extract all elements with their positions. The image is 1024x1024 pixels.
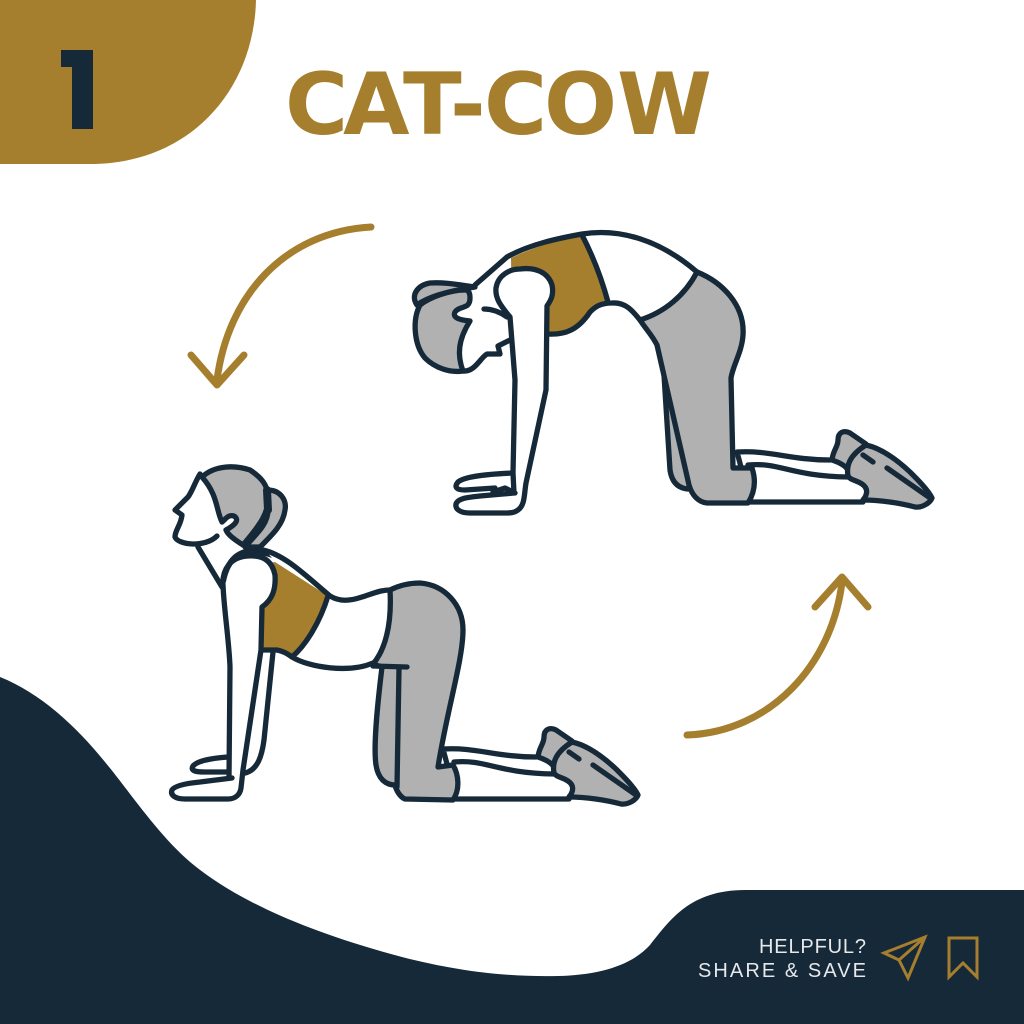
hair tie xyxy=(267,490,268,510)
footer call to action xyxy=(698,936,866,982)
back arm and hand xyxy=(192,652,273,773)
bottom wave background xyxy=(0,677,1024,1024)
legs and feet xyxy=(737,432,932,507)
arm xyxy=(456,269,553,513)
hair top xyxy=(414,283,475,305)
torso outlines xyxy=(263,550,390,668)
inner leg lines xyxy=(373,666,407,787)
figure: cow pose xyxy=(172,467,638,804)
sports bra xyxy=(258,562,328,657)
pants xyxy=(373,583,463,800)
bra lower trim xyxy=(262,650,292,657)
ponytail xyxy=(245,490,285,547)
icon: bookmark xyxy=(949,938,977,977)
icon: paper plane xyxy=(884,937,925,978)
arrow: top curved xyxy=(191,227,371,385)
pants xyxy=(640,272,754,503)
arrow: bottom curved xyxy=(687,577,868,735)
footer call to action: SHARE & SAVE xyxy=(698,960,866,982)
face and neck xyxy=(175,474,222,587)
figure: cat pose xyxy=(414,233,932,513)
torso outlines xyxy=(507,233,697,334)
knuckle detail xyxy=(493,488,515,493)
step number: 1 xyxy=(50,31,110,152)
legs and feet xyxy=(443,729,638,804)
title: CAT-COW xyxy=(285,55,712,155)
face and neck xyxy=(463,257,510,371)
back hand xyxy=(456,473,513,490)
footer call to action: HELPFUL? xyxy=(759,936,866,958)
sports bra xyxy=(511,235,608,334)
rear leg xyxy=(664,375,693,489)
hair xyxy=(202,467,268,545)
hair xyxy=(415,290,470,371)
shoulder band xyxy=(222,549,272,585)
number tab xyxy=(0,0,256,164)
front arm xyxy=(172,556,275,799)
